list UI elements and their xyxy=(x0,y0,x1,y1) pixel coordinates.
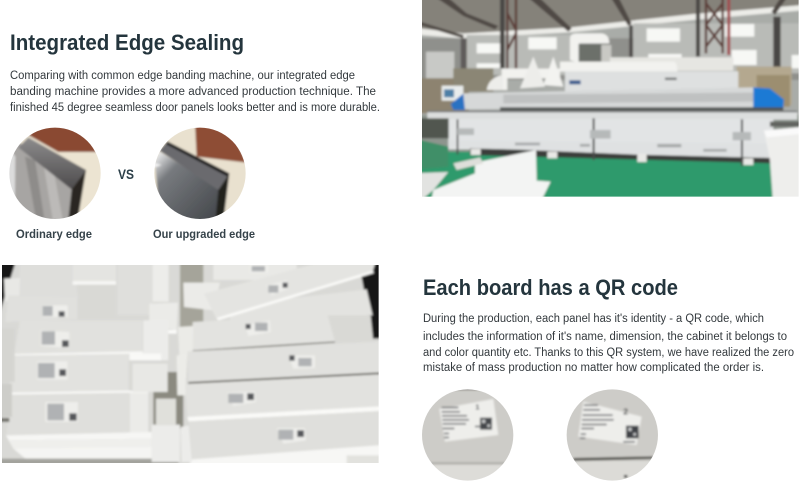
text block: edge sealing description: Comparing with common edge banding machine, our integrated edge xyxy=(10,70,355,82)
photo: QR label circle 2 xyxy=(566,389,658,481)
text block: edge sealing description: finished 45 degree seamless door panels looks better and is more durable. xyxy=(10,102,380,114)
photo: QR label circle 1: 1 xyxy=(475,403,479,412)
photo: ordinary edge circle xyxy=(9,128,101,219)
text block: QR code description: During the production, each panel has it's identity - a QR code, which xyxy=(423,313,764,325)
photo: QR label circle 1 xyxy=(422,389,514,481)
text block: QR code description xyxy=(423,313,794,374)
text block: edge sealing description xyxy=(10,70,380,114)
label: VS: VS xyxy=(118,166,134,182)
photo: stacked boards with QR labels xyxy=(0,259,387,472)
caption: Our upgraded edge: Our upgraded edge xyxy=(153,229,255,241)
photo: upgraded edge circle xyxy=(154,128,246,219)
text block: QR code description: and color quantity etc. Thanks to this QR system, we have realized the zero xyxy=(423,347,794,359)
text block: QR code description: includes the information of it's name, dimension, the cabinet it belongs to xyxy=(423,331,787,343)
caption: Ordinary edge: Ordinary edge xyxy=(16,229,92,241)
heading: Integrated Edge Sealing: Integrated Edge Sealing xyxy=(10,30,244,55)
text block: edge sealing description: banding machine provides a more advanced production technique. The xyxy=(10,86,376,98)
photo: edge banding machine in factory xyxy=(413,0,802,207)
photo: QR label circle 2: 2 xyxy=(623,406,628,416)
text block: QR code description: mistake of mass production no matter how complicated the order is. xyxy=(423,362,764,374)
heading: Each board has a QR code: Each board has a QR code xyxy=(423,275,678,300)
